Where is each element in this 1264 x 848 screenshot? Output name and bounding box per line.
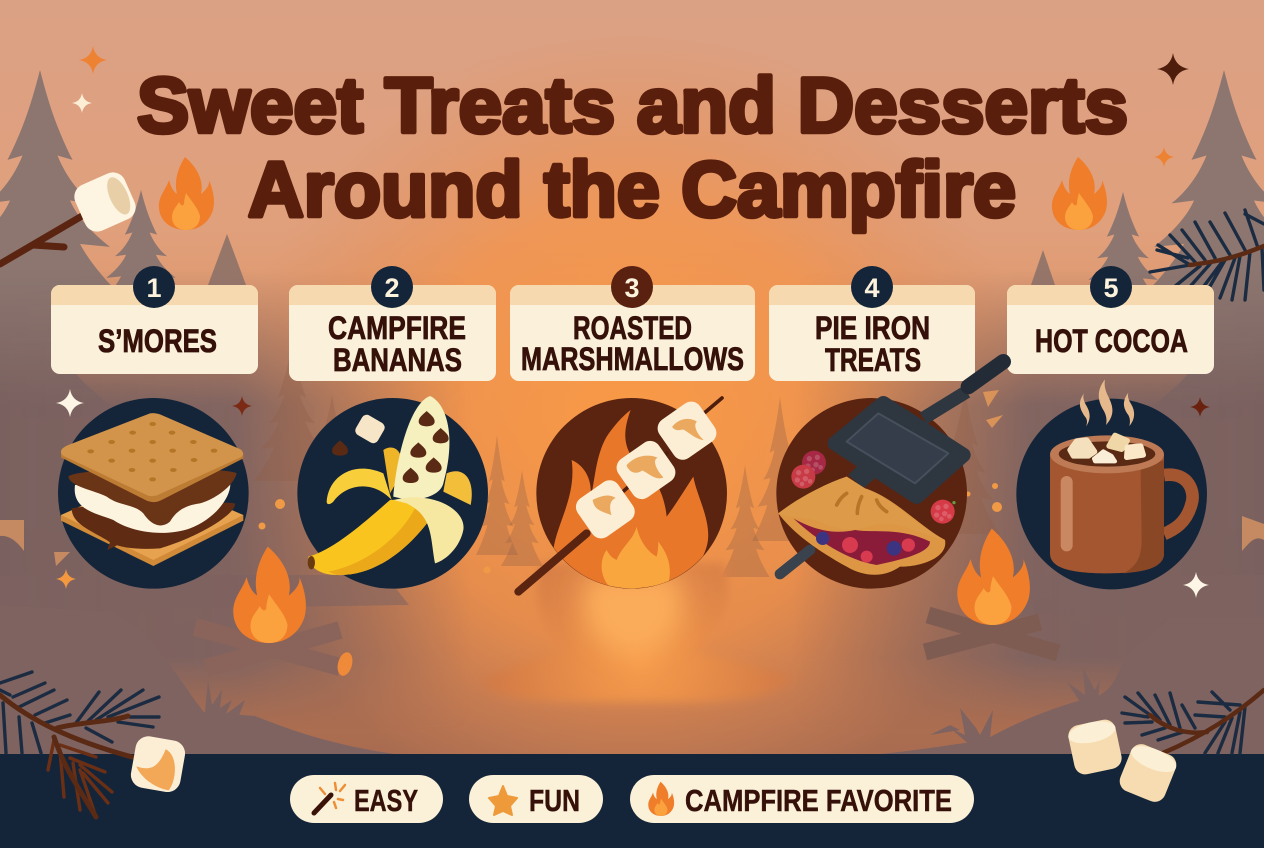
panel: pie iron treats label: TREATS [825, 342, 921, 378]
icon: pine branch top right [1150, 210, 1264, 302]
mid forest trees [0, 345, 1264, 577]
icon: hot cocoa mug [1016, 379, 1207, 589]
panel: hot cocoa label: 5 [1103, 273, 1119, 303]
icon: marshmallow on stick [0, 168, 140, 264]
footer band [0, 754, 1264, 848]
panel: s'mores label: 1 [146, 273, 162, 303]
right campfire [925, 529, 1058, 653]
panel: s'mores label: S’MORES [98, 323, 217, 359]
grass tufts [205, 668, 1100, 745]
panel: hot cocoa label: HOT COCOA [1035, 323, 1188, 359]
icon: marshmallow bottom left [129, 734, 187, 794]
icon: roasted marshmallows [518, 397, 727, 595]
icon: marshmallow bottom right one [1066, 718, 1124, 776]
icon: s'more [58, 398, 249, 589]
panel: campfire bananas label: 2 [384, 273, 400, 303]
pine branch bottom left [0, 672, 159, 817]
badge: fun [469, 775, 603, 823]
badge: campfire favorite: CAMPFIRE FAVORITE [685, 783, 952, 818]
icon: pie iron and pie [776, 362, 1003, 589]
badge: campfire favorite [630, 775, 974, 823]
forest silhouettes left [0, 70, 246, 418]
panel: roasted marshmallows label [510, 266, 755, 381]
panel: pie iron treats label: PIE IRON [815, 310, 930, 346]
panel: campfire bananas label: BANANAS [333, 342, 462, 378]
ground shadow bands [0, 575, 1264, 754]
sparkles and embers [56, 46, 1210, 598]
side shadow right [813, 280, 1264, 718]
icon: title flame right [1052, 157, 1107, 230]
icon: banana [297, 396, 488, 589]
badge: easy [290, 775, 443, 823]
pine branch bottom right [1122, 690, 1264, 753]
panel: s'mores label [51, 266, 258, 374]
title [137, 61, 1128, 233]
badge: fun: FUN [529, 783, 580, 818]
center fire glow [483, 563, 793, 702]
title: Around the Campfire [248, 145, 1016, 233]
badge: easy: EASY [354, 783, 418, 818]
side shadow left [0, 280, 451, 717]
panel: hot cocoa label [1007, 266, 1214, 374]
panel: roasted marshmallows label: ROASTED [573, 310, 692, 346]
title: Sweet Treats and Desserts [137, 61, 1128, 149]
panel: roasted marshmallows label: MARSHMALLOWS [521, 341, 744, 377]
panel: pie iron treats label: 4 [864, 273, 880, 303]
left campfire [195, 547, 355, 677]
panel: campfire bananas label [289, 266, 496, 381]
icon: title flame left [159, 157, 214, 230]
panel: pie iron treats label [769, 266, 975, 381]
icon: marshmallow bottom right two [1116, 741, 1180, 805]
panel: campfire bananas label: CAMPFIRE [328, 310, 466, 346]
panel: roasted marshmallows label: 3 [624, 273, 640, 303]
forest silhouettes right [1031, 70, 1264, 418]
